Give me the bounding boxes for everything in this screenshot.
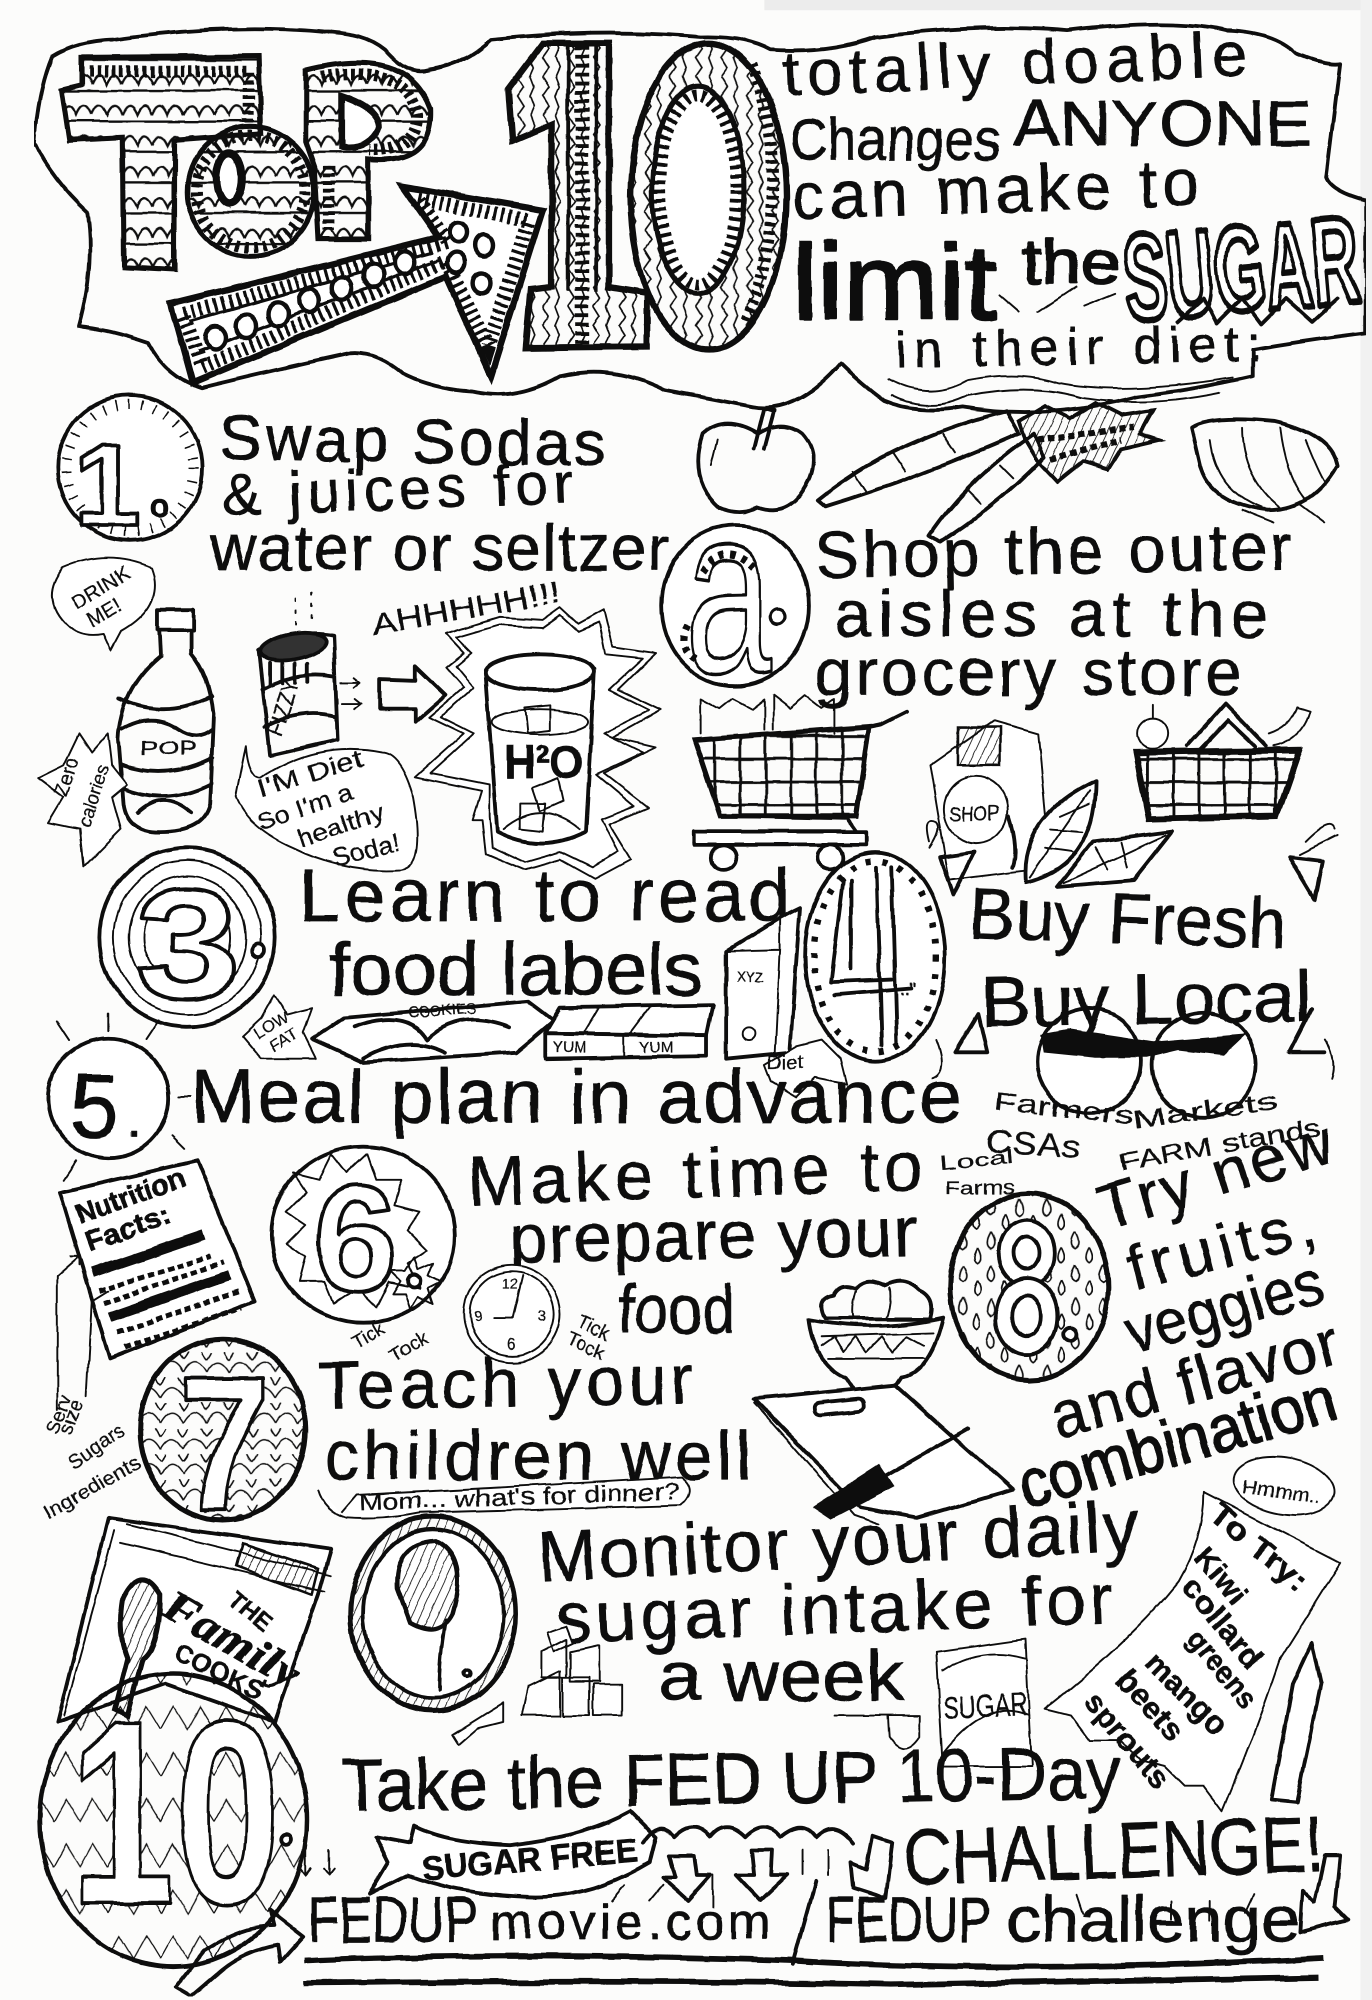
badge 1: 1 xyxy=(74,419,140,551)
badge 7: 7 xyxy=(178,1337,270,1551)
annotations: Sugars xyxy=(64,1420,130,1475)
website links: challenge xyxy=(1006,1883,1299,1955)
icon: shopping cart xyxy=(694,695,907,870)
heading 6: food xyxy=(618,1271,735,1348)
icon: family cookbook xyxy=(57,1518,331,1722)
squiggle underline xyxy=(888,376,1233,405)
banner: sugar free: SUGAR FREE xyxy=(420,1832,639,1888)
badge 6: 6 xyxy=(313,1155,397,1323)
website links: FEDUP xyxy=(308,1883,478,1955)
icon: apple xyxy=(698,408,813,512)
local markets notes: FARM stands xyxy=(1117,1114,1323,1177)
icon: family cookbook: Family xyxy=(153,1579,311,1699)
step 5 xyxy=(48,1014,962,1180)
big number 0 xyxy=(631,43,786,349)
heading 2 xyxy=(814,510,1293,710)
icon: clock with tick tock: 3 xyxy=(538,1308,546,1325)
icon: fizzy can xyxy=(258,593,361,755)
local markets notes: Markets xyxy=(1131,1087,1280,1135)
speech bubble: I'm diet: Soda! xyxy=(328,829,403,873)
heading 8: veggies xyxy=(1116,1246,1332,1368)
speech bubble: I'm diet xyxy=(236,745,418,873)
speech bubble: drink me: DRINK xyxy=(68,563,134,614)
heading 4: Buy Fresh xyxy=(968,873,1289,965)
heading 2: Shop the outer xyxy=(814,510,1293,593)
header text: ANYONE xyxy=(1013,87,1312,159)
big arrow xyxy=(171,186,543,383)
to try list: beets xyxy=(1109,1663,1190,1747)
arrow dots xyxy=(205,222,493,349)
step 9 xyxy=(350,1486,1140,1716)
annotations: Serv xyxy=(44,1392,77,1437)
callout: diet: Diet xyxy=(767,1052,803,1074)
nutrition facts label: Nutrition xyxy=(70,1162,189,1230)
annotations: size xyxy=(56,1398,88,1437)
heading 8: combination xyxy=(1009,1361,1346,1523)
step 8 xyxy=(950,1104,1346,1523)
badge 1: o xyxy=(150,488,169,525)
nutrition facts label: Facts: xyxy=(81,1199,175,1258)
icon: clock with tick tock: Tick xyxy=(349,1318,389,1354)
badge 6 xyxy=(271,1147,455,1323)
heading 9 xyxy=(536,1486,1140,1716)
to try list: To Try: xyxy=(1203,1497,1315,1599)
annotations: Ingredients xyxy=(40,1451,145,1525)
local markets notes: Farms xyxy=(945,1178,1015,1199)
badge 4: .." xyxy=(899,979,916,999)
underlines xyxy=(303,1956,1325,1985)
callout: zero calories: Zero xyxy=(51,755,83,799)
burst exclamation: AHHHHH!!! xyxy=(369,575,563,642)
icon: cutting board and knife xyxy=(754,1385,1013,1524)
icon: yum bars: YUM xyxy=(640,1039,673,1056)
header text xyxy=(781,17,1364,405)
badge 4 xyxy=(805,852,945,1061)
nutrition facts label xyxy=(40,1161,255,1525)
heading 7: children well xyxy=(325,1418,752,1495)
icon: family cookbook: COOKS xyxy=(169,1638,267,1705)
heading 9: Monitor your daily xyxy=(536,1486,1140,1598)
website links: movie.com xyxy=(490,1893,771,1950)
icon: yum bars: YUM xyxy=(553,1039,587,1056)
banner: sugar free xyxy=(369,1811,656,1897)
badge 3 xyxy=(99,848,275,1030)
icon: carrots xyxy=(818,403,1159,542)
heading 2: aisles at the xyxy=(834,577,1268,651)
heading 3 xyxy=(299,854,790,1011)
callout: low fat: FAT xyxy=(266,1025,301,1056)
icon: fizzy can: FIZZY xyxy=(262,675,304,739)
heading 6: prepare your xyxy=(508,1194,917,1278)
heading 7 xyxy=(317,1341,752,1495)
callout: low fat xyxy=(242,995,316,1059)
heading 1: & juices for xyxy=(221,451,573,528)
to try list: sprouts xyxy=(1077,1685,1177,1795)
callout: zero calories xyxy=(38,733,127,867)
heading 1: Swap Sodas xyxy=(219,401,606,480)
icon: grocery bag: SHOP xyxy=(949,803,1000,825)
heading 7: Teach your xyxy=(317,1341,694,1424)
icon: clock with tick tock: 12 xyxy=(502,1275,518,1291)
icon: grocery bag xyxy=(930,721,1051,880)
icon: basket xyxy=(1136,704,1310,819)
icon: clock with tick tock xyxy=(349,1265,614,1367)
icon: soda bottle: POP xyxy=(140,739,197,760)
speech bubble: hmmm: Hmmm.. xyxy=(1241,1476,1323,1508)
local markets notes: Farmers xyxy=(993,1088,1135,1130)
callout: low fat: LOW xyxy=(250,1007,292,1043)
icon: sugar bag and scoop xyxy=(834,1639,1032,1767)
badge 1 xyxy=(57,395,203,551)
step 10 xyxy=(39,1667,1325,1967)
step 1 xyxy=(57,395,669,584)
header text: limit xyxy=(792,222,996,342)
heading 9: a week xyxy=(659,1636,905,1716)
speech bubble: what's for dinner: Mom... what's for dinner? xyxy=(359,1478,680,1515)
heading 1 xyxy=(209,401,669,584)
icon: sugar bag and scoop: SUGAR xyxy=(942,1686,1028,1727)
badge 3: 3 xyxy=(135,856,239,1030)
heading 9: sugar intake for xyxy=(554,1559,1115,1659)
website links: FEDUP xyxy=(825,1883,991,1955)
big number 1 xyxy=(508,43,647,348)
heading 2: grocery store xyxy=(815,636,1242,710)
callout: zero calories: calories xyxy=(74,761,114,831)
heading 4 xyxy=(968,873,1312,1043)
letter P xyxy=(306,63,431,239)
step 3 xyxy=(99,848,790,1030)
icon: clock with tick tock: Tock xyxy=(564,1329,608,1364)
arrow to links xyxy=(176,1911,303,1996)
header text: can make to xyxy=(790,146,1200,234)
to try list: greens xyxy=(1179,1623,1264,1715)
badge 5 xyxy=(48,1014,191,1180)
heading 8: fruits, xyxy=(1120,1188,1323,1304)
local markets notes: Local xyxy=(939,1147,1014,1175)
heading 10: Take the FED UP 10-Day xyxy=(340,1731,1121,1827)
badge 2: a xyxy=(685,458,772,723)
letter O xyxy=(187,126,315,256)
icon: onion xyxy=(1191,419,1338,523)
heading 5: Meal plan in advance xyxy=(191,1054,962,1139)
icon: tomatoes xyxy=(1037,1009,1256,1117)
badge 9 xyxy=(350,1517,516,1710)
local markets notes xyxy=(939,1087,1323,1199)
icon: cereal box: XYZ xyxy=(736,969,764,985)
speech bubble: I'm diet: I'M Diet xyxy=(255,745,367,803)
icon: yum bars xyxy=(545,1005,713,1059)
arrow to water xyxy=(380,666,446,722)
icon: sugar cubes and spoon xyxy=(452,1626,622,1745)
callout: diet xyxy=(764,1040,847,1097)
heading 8: and flavor xyxy=(1042,1306,1346,1452)
icon: pen xyxy=(1271,1643,1321,1801)
header text: the xyxy=(1022,228,1121,296)
icon: fruit bowl xyxy=(809,1281,943,1393)
badge 2 xyxy=(661,458,809,723)
speech bubble: drink me: ME! xyxy=(83,595,126,632)
icon: soda bottle xyxy=(118,610,214,832)
icon: clock with tick tock: 9 xyxy=(474,1308,482,1325)
heading 3: food labels xyxy=(329,928,703,1011)
icon: clock with tick tock: 6 xyxy=(507,1336,516,1353)
heading 8 xyxy=(1009,1104,1346,1523)
badge 8 xyxy=(950,1194,1108,1380)
step 4 xyxy=(805,821,1338,1117)
header text: totally doable xyxy=(781,17,1249,110)
heading 4: Buy Local xyxy=(980,957,1312,1043)
soda illustration xyxy=(38,558,661,879)
banner corners xyxy=(940,852,1325,1052)
heading 1: water or seltzer xyxy=(209,512,669,584)
letter P counter xyxy=(341,96,380,147)
icon: family cookbook: THE xyxy=(223,1586,277,1638)
speech bubble: hmmm xyxy=(1229,1449,1339,1522)
title: TOP xyxy=(61,56,431,270)
website links xyxy=(308,1881,1299,1964)
arrows row xyxy=(301,1827,1348,1932)
speech bubble: what's for dinner xyxy=(318,1477,690,1518)
to try list: collard xyxy=(1174,1571,1270,1676)
banner outline xyxy=(34,24,1366,412)
heading 6: Make time to xyxy=(467,1127,924,1220)
badge 10: 10 xyxy=(70,1667,280,1959)
step 6 xyxy=(271,1127,924,1348)
step 2 xyxy=(661,458,1293,723)
starburst and water glass xyxy=(415,607,661,879)
badge 5: . xyxy=(127,1090,142,1147)
icon: clock with tick tock: Tick xyxy=(574,1312,614,1346)
header text: Changes xyxy=(790,107,1000,172)
speech bubble: I'm diet: healthy xyxy=(294,799,388,853)
letter T xyxy=(61,56,261,270)
local markets notes: CSAs xyxy=(984,1123,1082,1166)
starburst and water glass: H²O xyxy=(504,736,583,788)
icon: cookie package: COOKIES xyxy=(407,1000,477,1022)
heading 3: Learn to read xyxy=(299,854,790,937)
annotations xyxy=(40,1256,145,1525)
badge 7 xyxy=(140,1337,306,1551)
heading 8: Try new xyxy=(1089,1104,1342,1244)
icon: cookie package xyxy=(312,1000,554,1062)
to try list: Kiwi xyxy=(1187,1541,1254,1612)
icon: clock with tick tock: Tock xyxy=(387,1328,432,1367)
to try list: mango xyxy=(1138,1645,1234,1742)
icon: cereal box xyxy=(726,908,800,1059)
header text: in their diet: xyxy=(895,315,1261,378)
icons: leaves xyxy=(1009,781,1172,886)
speech bubble: I'm diet: So I'm a xyxy=(254,778,357,837)
to try list xyxy=(1045,1492,1340,1811)
step 7 xyxy=(140,1337,752,1551)
badge 5: 5 xyxy=(70,1055,120,1155)
heading 6 xyxy=(467,1127,924,1348)
speech bubble: drink me xyxy=(52,558,155,651)
header banner xyxy=(34,17,1366,412)
heading 10 xyxy=(340,1731,1325,1902)
